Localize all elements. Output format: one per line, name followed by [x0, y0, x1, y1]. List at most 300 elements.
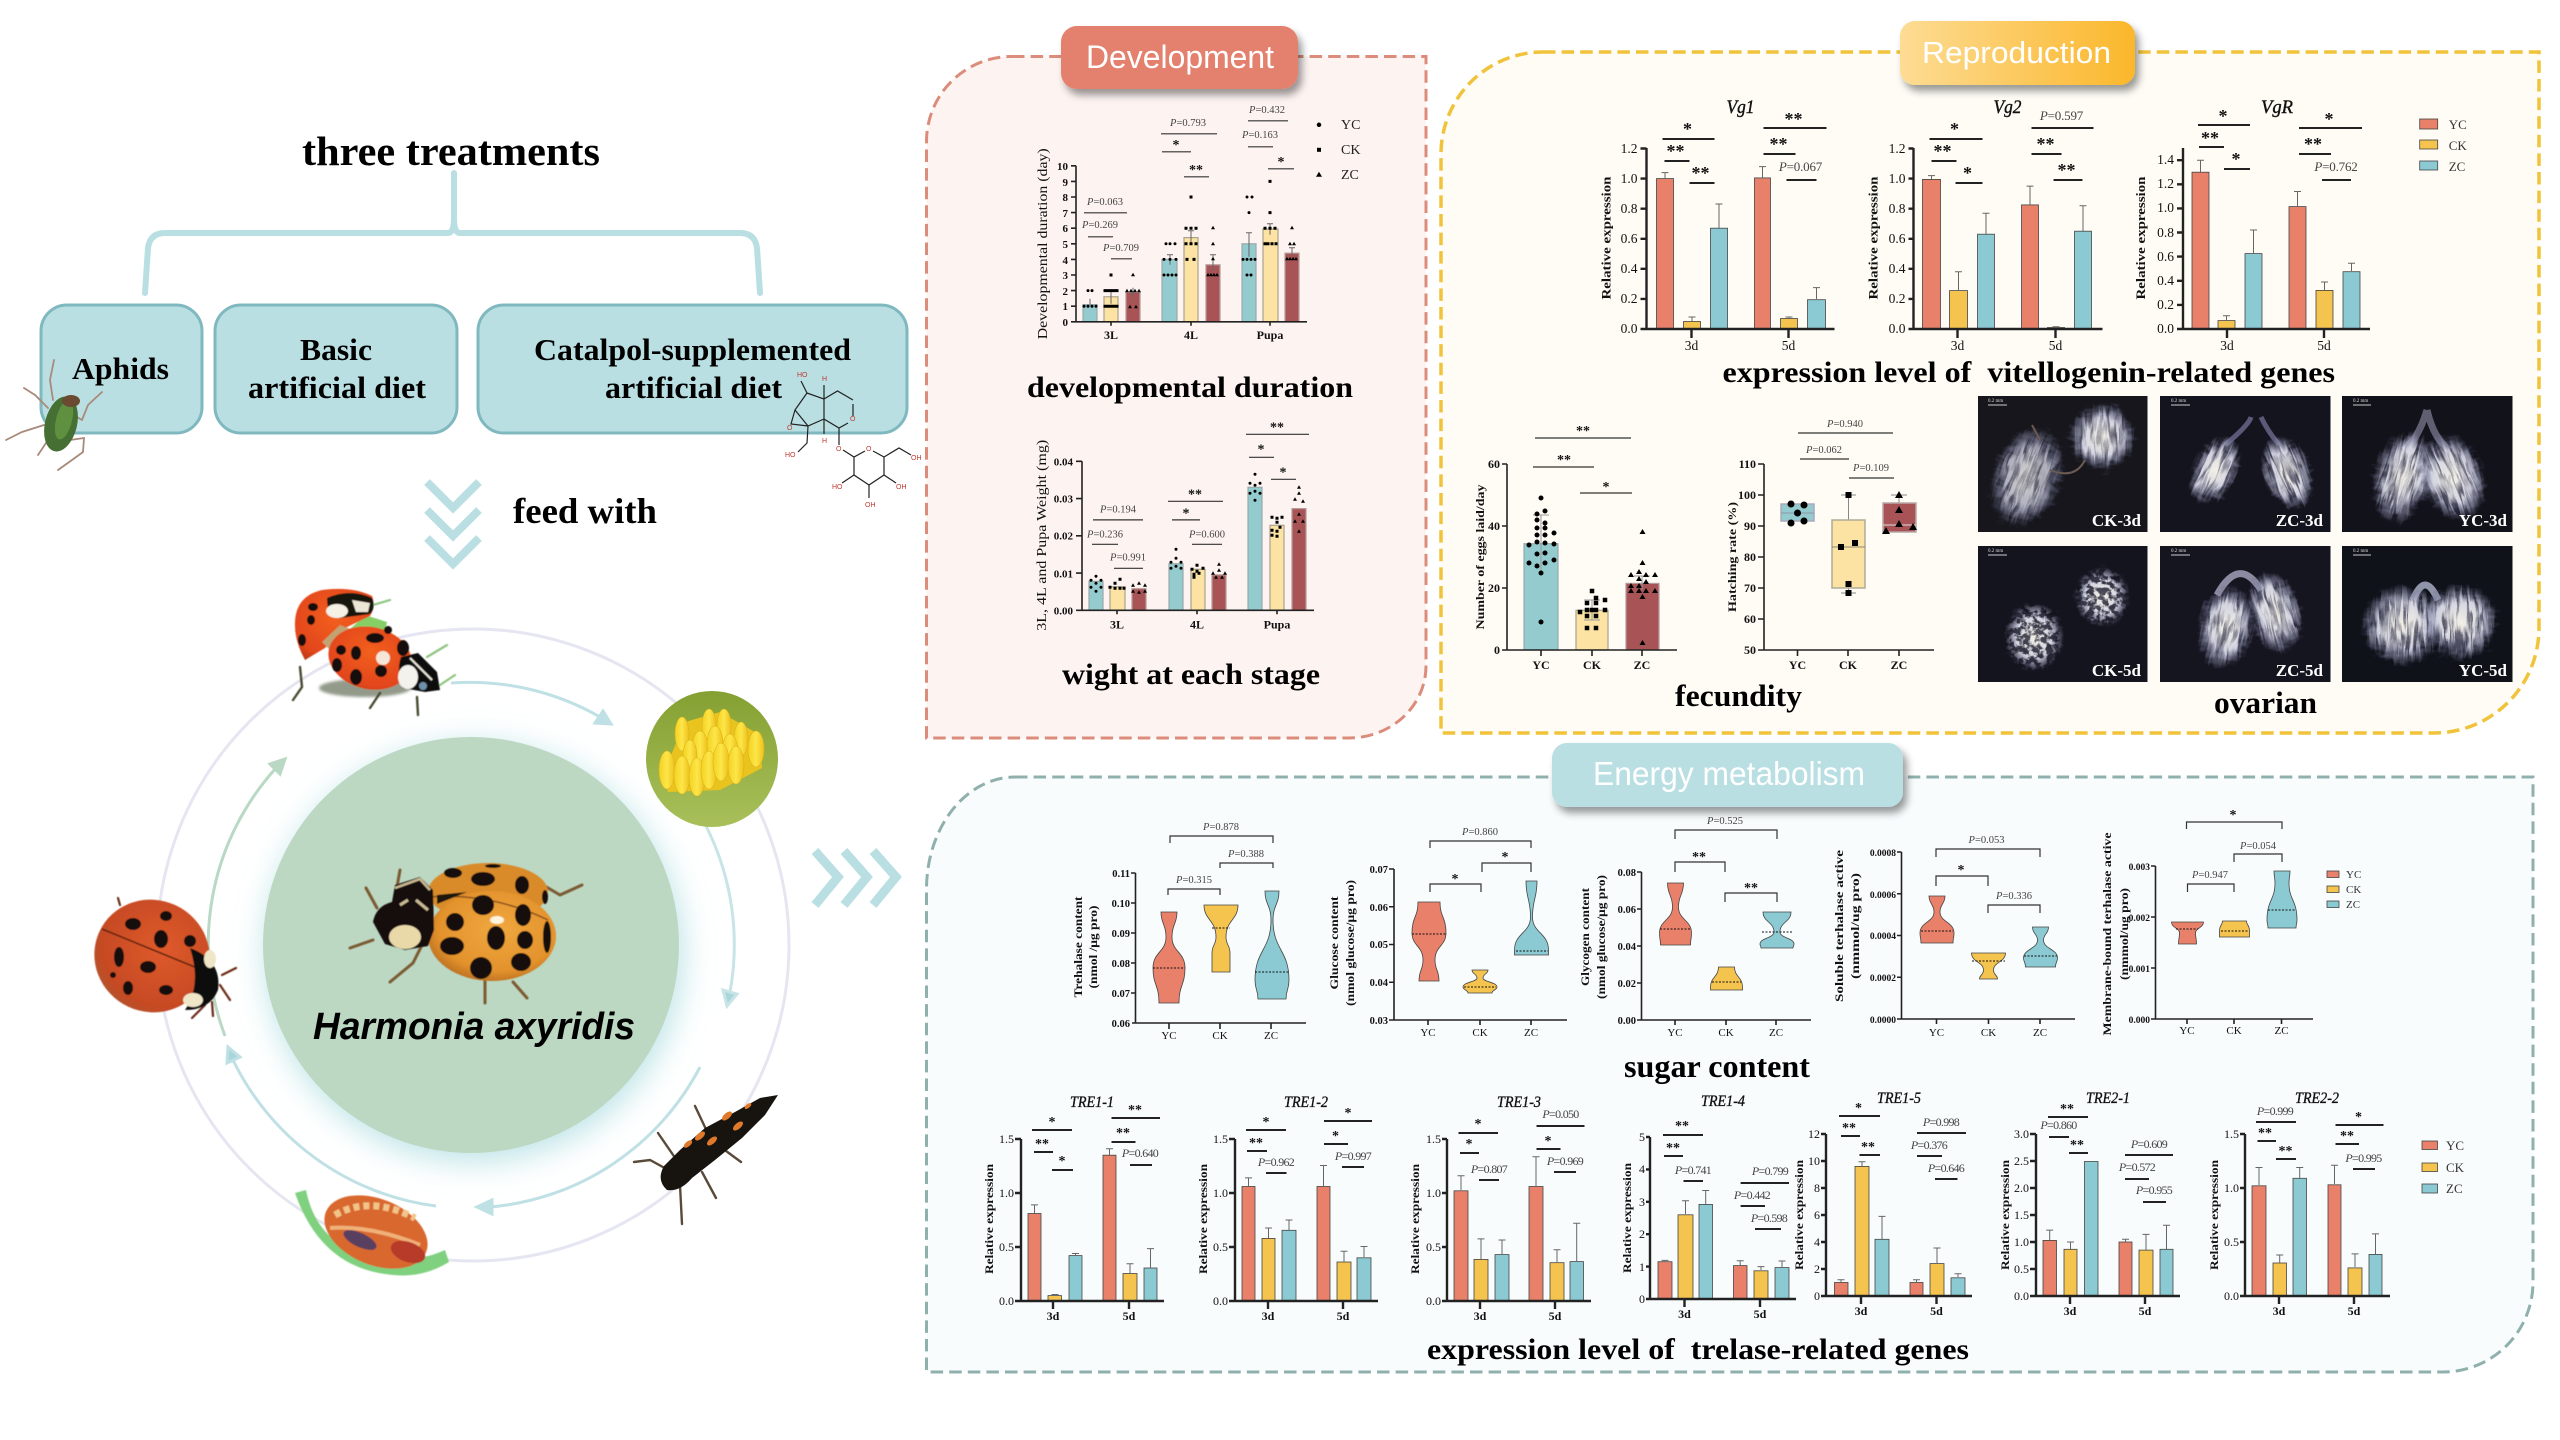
chart: glucose content violin: P=0.860	[1461, 827, 1498, 838]
chart: glycogen content violin: (nmol glucose/μg pro)	[1594, 875, 1608, 999]
chart: trehalase content violin: 0.06	[1112, 1019, 1130, 1030]
chart: TRE1-3 expression	[1408, 1094, 1591, 1323]
icon: catalpol chemical structure: HO	[785, 452, 796, 459]
chart: Vg1 expression: P=0.067	[1778, 159, 1823, 174]
legend: sugar charts: CK	[2346, 884, 2361, 896]
chart: weight at each stage: 0.01	[1054, 568, 1073, 580]
caption: vitellogenin genes: expression level of vitellogenin-related genes	[1722, 356, 2335, 389]
caption: developmental duration: developmental duration	[1027, 371, 1353, 404]
micrograph: YC-5d ovary	[2342, 546, 2512, 682]
chart: TRE1-5 expression: **	[1861, 1140, 1875, 1155]
chart: developmental duration	[1036, 105, 1360, 342]
chart: soluble trehalase violin: 0.0000	[1870, 1016, 1896, 1026]
chart: TRE2-1 expression: 0.0	[2014, 1289, 2029, 1303]
chart: developmental duration: 10	[1057, 161, 1068, 173]
arrow: larva to pupa	[477, 1067, 700, 1214]
chart: TRE1-2 expression	[1196, 1094, 1378, 1323]
micrograph: YC-5d ovary: YC-5d	[2459, 661, 2508, 680]
chart: TRE1-4 expression: P=0.741	[1674, 1163, 1712, 1177]
chart: TRE1-4 expression: 1	[1639, 1260, 1645, 1274]
icon: pupa on leaf	[295, 1181, 449, 1283]
chart: TRE1-5 expression: 2	[1814, 1262, 1820, 1276]
chart: soluble trehalase violin: ZC	[2033, 1027, 2047, 1039]
chart: number of eggs laid: 60	[1488, 457, 1500, 471]
chart: hatching rate: P=0.109	[1852, 463, 1889, 474]
icon: catalpol chemical structure: HO	[797, 372, 808, 379]
chart: TRE1-4 expression: 3	[1639, 1195, 1645, 1209]
chart: soluble trehalase violin: 0.0004	[1870, 932, 1896, 942]
chart: TRE1-3 expression: *	[1466, 1137, 1472, 1152]
chart: trehalase content violin: 0.10	[1112, 899, 1130, 910]
chart: glucose content violin: 0.05	[1370, 940, 1388, 951]
chart: developmental duration: P=0.709	[1102, 243, 1139, 254]
chart: TRE1-2 expression: TRE1-2	[1284, 1094, 1328, 1111]
chart: TRE2-2 expression: **	[2340, 1129, 2354, 1144]
chart: developmental duration: 4	[1062, 255, 1068, 267]
chart: TRE2-2 expression: 3d	[2273, 1304, 2286, 1318]
chart: TRE1-3 expression: Relative expression	[1408, 1164, 1422, 1274]
legend: ZC	[1341, 168, 1359, 183]
micrograph: CK-5d ovary: CK-5d	[2092, 661, 2142, 680]
chart: membrane-bound trehalase violin: P=0.054	[2239, 841, 2277, 852]
chart: TRE1-3 expression: 0.0	[1426, 1294, 1441, 1308]
chart: Vg1 expression: 1.2	[1621, 141, 1638, 156]
arrow: adult to eggs	[451, 682, 611, 724]
chart: VgR expression: 0.6	[2157, 249, 2174, 264]
box: Aphids	[41, 305, 202, 433]
chart: TRE2-2 expression	[2207, 1090, 2390, 1318]
micrograph: CK-3d ovary: 0.2 mm	[1988, 399, 2003, 404]
central green circle	[263, 737, 679, 1153]
chart: Vg1 expression: 0.4	[1621, 261, 1638, 276]
legend: trelase genes: CK	[2446, 1160, 2465, 1175]
chart: Vg2 expression: 0.8	[1889, 201, 1906, 216]
chart: TRE2-1 expression: 3d	[2064, 1304, 2077, 1318]
legend: vitellogenin genes: YC	[2449, 117, 2467, 132]
chart: glucose content violin: (nmol glucose/μg pro)	[1343, 880, 1357, 1006]
chart: weight at each stage: Pupa	[1264, 617, 1290, 631]
chart: glycogen content violin: 0.00	[1618, 1016, 1636, 1027]
chart: developmental duration: **	[1189, 163, 1203, 178]
chart: soluble trehalase violin: P=0.336	[1995, 891, 2032, 902]
chart: number of eggs laid: Number of eggs laid/day	[1473, 484, 1487, 630]
chart: TRE1-5 expression: 5d	[1930, 1304, 1943, 1318]
micrograph: CK-3d ovary	[1975, 396, 2148, 538]
chart: membrane-bound trehalase violin: Membrane-bound terhalase active	[2100, 832, 2114, 1036]
chart: trehalase content violin	[1071, 822, 1306, 1042]
caption: sugar content: sugar content	[1624, 1048, 1810, 1084]
chart: TRE1-3 expression: P=0.050	[1541, 1107, 1579, 1121]
chart: TRE1-3 expression: *	[1544, 1134, 1552, 1149]
chart: trehalase content violin: Trehalase content	[1071, 896, 1085, 997]
box: Basic artificial diet: artificial diet	[248, 370, 427, 405]
chart: TRE1-5 expression: **	[1842, 1121, 1856, 1136]
micrograph: ZC-3d ovary: ZC-3d	[2276, 511, 2324, 530]
chart: hatching rate: P=0.062	[1805, 445, 1842, 456]
chart: TRE1-5 expression	[1792, 1090, 1972, 1318]
chart: VgR expression	[2133, 97, 2370, 353]
legend: trelase genes	[2422, 1138, 2465, 1196]
chart: TRE1-1 expression: **	[1116, 1126, 1130, 1141]
chart: TRE1-1 expression: 0.0	[999, 1294, 1014, 1308]
chart: VgR expression: 0.8	[2157, 225, 2174, 240]
icon: mating ladybugs	[293, 589, 455, 715]
chart: number of eggs laid: YC	[1532, 658, 1550, 672]
chart: weight at each stage: 4L	[1190, 617, 1204, 631]
chart: TRE2-1 expression: Relative expression	[1998, 1160, 2012, 1270]
chart: weight at each stage: 0.03	[1054, 493, 1074, 505]
chart: TRE1-2 expression: 0.5	[1213, 1240, 1228, 1254]
legend: vitellogenin genes: ZC	[2449, 159, 2465, 174]
chart: Vg1 expression: 0.0	[1621, 321, 1638, 336]
chart: membrane-bound trehalase violin: P=0.947	[2191, 870, 2228, 881]
box: Catalpol-supplemented artificial diet: artificial diet	[605, 370, 783, 405]
chart: TRE2-1 expression: **	[2060, 1102, 2074, 1117]
chart: developmental duration: 3	[1062, 270, 1068, 282]
chart: developmental duration: 8	[1062, 192, 1068, 204]
chart: trehalase content violin: P=0.388	[1227, 849, 1264, 860]
chart: Vg1 expression: Relative expression	[1598, 176, 1614, 300]
chart: Vg2 expression: 1.2	[1889, 141, 1906, 156]
icon: catalpol chemical structure: OH	[865, 502, 876, 509]
chart: TRE2-2 expression: 0.5	[2224, 1235, 2239, 1249]
chart: TRE1-5 expression: P=0.998	[1922, 1115, 1960, 1129]
chart: TRE1-3 expression: P=0.969	[1546, 1154, 1584, 1168]
chart: weight at each stage	[1035, 420, 1314, 631]
chart: hatching rate: 70	[1744, 581, 1756, 595]
heading badge: Reproduction	[1900, 21, 2135, 85]
chart: TRE1-2 expression: 3d	[1262, 1309, 1275, 1323]
chart: TRE2-2 expression: **	[2278, 1144, 2292, 1159]
chart: membrane-bound trehalase violin: CK	[2226, 1025, 2242, 1037]
chart: Vg2 expression: P=0.597	[2039, 108, 2084, 123]
chart: VgR expression: 0.4	[2157, 273, 2174, 288]
chart: trehalase content violin: YC	[1161, 1030, 1177, 1042]
chart: TRE1-5 expression: 8	[1814, 1181, 1820, 1195]
micrograph: ZC-5d ovary: ZC-5d	[2276, 661, 2324, 680]
caption: trelase genes: expression level of trelase-related genes	[1427, 1333, 1969, 1366]
micrograph: YC-3d ovary: YC-3d	[2459, 511, 2508, 530]
chart: glycogen content violin: **	[1744, 881, 1758, 896]
chart: Vg2 expression: Vg2	[1994, 97, 2022, 118]
micrograph: ZC-5d ovary	[2160, 546, 2330, 682]
chart: TRE2-2 expression: P=0.999	[2256, 1104, 2294, 1118]
micrograph: YC-3d ovary: 0.2 mm	[2353, 399, 2368, 404]
chart: glycogen content violin: 0.02	[1618, 979, 1636, 990]
chart: trehalase content violin: P=0.315	[1175, 875, 1212, 886]
chart: TRE1-2 expression: 0.0	[1213, 1294, 1228, 1308]
icon: catalpol chemical structure: O	[787, 425, 793, 432]
chart: Vg2 expression: 0.4	[1889, 261, 1906, 276]
chart: soluble trehalase violin	[1832, 835, 2075, 1039]
arrow: pupa to adult	[227, 1047, 436, 1206]
chart: VgR expression: 0.2	[2157, 297, 2174, 312]
legend: vitellogenin genes	[2420, 117, 2467, 174]
heading: three treatments: three treatments	[302, 128, 600, 174]
chart: hatching rate: Hatching rate (%)	[1725, 502, 1739, 612]
chart: TRE1-1 expression: 3d	[1047, 1309, 1060, 1323]
chart: weight at each stage: P=0.991	[1109, 552, 1146, 563]
chart: TRE1-2 expression: **	[1249, 1136, 1263, 1151]
chart: TRE2-1 expression: P=0.609	[2130, 1137, 2168, 1151]
chart: soluble trehalase violin: P=0.053	[1968, 835, 2004, 846]
chart: TRE1-4 expression: 5d	[1754, 1307, 1767, 1321]
icon: catalpol chemical structure: O	[866, 446, 872, 453]
chart: developmental duration: 4L	[1184, 328, 1198, 342]
chart: soluble trehalase violin: *	[1958, 863, 1964, 878]
chart: weight at each stage: 0.00	[1054, 605, 1074, 617]
chart: Vg2 expression: Relative expression	[1866, 176, 1880, 300]
icon: catalpol chemical structure: H	[822, 438, 827, 445]
chart: developmental duration: 9	[1062, 177, 1068, 189]
chart: trehalase content violin: ZC	[1264, 1030, 1278, 1042]
chart: TRE1-5 expression: TRE1-5	[1877, 1090, 1921, 1107]
panel: Energy metabolism	[926, 743, 2533, 1372]
chart: TRE2-2 expression: 1.5	[2224, 1127, 2239, 1141]
chart: weight at each stage: P=0.236	[1086, 529, 1123, 540]
chart: developmental duration: P=0.269	[1081, 220, 1118, 231]
chart: VgR expression: *	[2232, 149, 2240, 169]
chart: Vg1 expression: 0.6	[1621, 231, 1638, 246]
chart: TRE1-2 expression: *	[1344, 1106, 1352, 1121]
chart: developmental duration: *	[1278, 155, 1284, 170]
chart: weight at each stage: *	[1258, 442, 1264, 457]
chart: TRE1-1 expression: **	[1128, 1103, 1142, 1118]
chart: TRE1-2 expression: P=0.962	[1257, 1155, 1295, 1169]
chart: VgR expression: 3d	[2220, 338, 2234, 353]
chart: Vg1 expression: 0.2	[1621, 291, 1638, 306]
chart: developmental duration: 3L	[1104, 328, 1118, 342]
chart: Vg2 expression	[1866, 97, 2102, 353]
chart: developmental duration: Developmental duration (day)	[1036, 148, 1051, 339]
chart: VgR expression: 1.0	[2157, 200, 2174, 215]
chart: membrane-bound trehalase violin: 0.000	[2129, 1016, 2150, 1026]
chart: Vg1 expression: 1.0	[1621, 171, 1638, 186]
caption: ovarian: ovarian	[2214, 685, 2317, 720]
chart: TRE2-1 expression	[1998, 1090, 2180, 1318]
chart: Vg2 expression: **	[1934, 141, 1952, 161]
chart: VgR expression: 1.2	[2157, 176, 2174, 191]
chart: soluble trehalase violin: 0.0006	[1870, 891, 1896, 901]
chart: TRE1-2 expression: *	[1262, 1115, 1270, 1130]
chart: Vg2 expression: 1.0	[1889, 171, 1906, 186]
label: Harmonia axyridis: Harmonia axyridis	[313, 1006, 635, 1048]
chart: weight at each stage: *	[1280, 465, 1286, 480]
chart: membrane-bound trehalase violin: *	[2230, 808, 2236, 823]
heading badge: Energy metabolism	[1552, 743, 1903, 807]
chart: membrane-bound trehalase violin: YC	[2179, 1025, 2195, 1037]
chart: TRE2-1 expression: P=0.955	[2135, 1183, 2173, 1197]
chart: TRE1-4 expression: P=0.799	[1751, 1164, 1789, 1178]
chart: glucose content violin: *	[1452, 872, 1458, 887]
chart: TRE1-3 expression: 3d	[1474, 1309, 1487, 1323]
chart: developmental duration: P=0.432	[1248, 105, 1285, 116]
heading badge: Reproduction: Reproduction	[1922, 35, 2111, 70]
chart: glycogen content violin: 0.08	[1618, 868, 1636, 879]
chart: TRE1-2 expression: P=0.997	[1334, 1149, 1372, 1163]
chart: number of eggs laid: **	[1576, 424, 1590, 439]
micrograph: ZC-5d ovary: 0.2 mm	[2171, 549, 2186, 554]
chart: Vg1 expression: **	[1666, 141, 1684, 161]
chart: number of eggs laid: ZC	[1634, 658, 1650, 672]
chart: glucose content violin: CK	[1472, 1027, 1488, 1039]
chart: developmental duration: 5	[1062, 239, 1068, 251]
chart: TRE2-2 expression: 1.0	[2224, 1181, 2239, 1195]
chart: TRE1-1 expression: TRE1-1	[1070, 1094, 1114, 1111]
chart: glucose content violin: *	[1502, 850, 1508, 865]
box: Basic artificial diet: Basic	[300, 332, 372, 367]
chart: hatching rate: 90	[1744, 519, 1756, 533]
chart: TRE2-1 expression: TRE2-1	[2086, 1090, 2130, 1107]
icon: catalpol chemical structure: HO	[832, 484, 843, 491]
chart: TRE1-1 expression: P=0.640	[1121, 1146, 1159, 1160]
chart: soluble trehalase violin: (nmmol/ug pro)	[1848, 873, 1862, 979]
chart: TRE1-4 expression: 4	[1639, 1162, 1645, 1176]
chart: TRE1-4 expression: TRE1-4	[1701, 1093, 1745, 1110]
chart: TRE2-2 expression: TRE2-2	[2295, 1090, 2339, 1107]
chart: TRE2-2 expression: P=0.995	[2344, 1151, 2382, 1165]
arrow: eggs to larva	[706, 826, 737, 1006]
chart: TRE1-5 expression: 6	[1814, 1208, 1820, 1222]
chart: TRE2-1 expression: 5d	[2139, 1304, 2152, 1318]
chart: glucose content violin: Glucose content	[1327, 896, 1341, 990]
chart: TRE1-3 expression: TRE1-3	[1497, 1094, 1541, 1111]
micrograph: ZC-3d ovary	[2160, 396, 2330, 532]
chart: TRE1-1 expression: *	[1058, 1154, 1066, 1169]
chart: TRE1-2 expression: 1.5	[1213, 1132, 1228, 1146]
heading badge: Development	[1061, 26, 1298, 89]
chart: Vg2 expression: 3d	[1951, 338, 1964, 353]
chart: number of eggs laid: 20	[1488, 581, 1500, 595]
panel: Development	[926, 26, 1426, 738]
chart: hatching rate: 80	[1744, 550, 1756, 564]
chart: developmental duration: 6	[1062, 223, 1068, 235]
chart: glycogen content violin: CK	[1718, 1027, 1734, 1039]
chart: TRE1-1 expression: Relative expression	[982, 1164, 996, 1274]
chart: VgR expression: VgR	[2261, 97, 2293, 118]
chart: VgR expression: *	[2218, 106, 2228, 126]
chart: TRE2-2 expression: 0.0	[2224, 1289, 2239, 1303]
chart: glucose content violin	[1327, 827, 1567, 1039]
legend: CK	[1341, 143, 1360, 158]
chart: TRE1-3 expression: 1.5	[1426, 1132, 1441, 1146]
chart: weight at each stage: 3L, 4L and Pupa Weight (mg)	[1035, 439, 1050, 631]
life cycle diagram	[76, 589, 789, 1283]
chart: TRE1-3 expression: *	[1474, 1117, 1482, 1132]
heading badge: Energy metabolism: Energy metabolism	[1593, 755, 1865, 792]
legend: sugar charts: ZC	[2346, 899, 2360, 911]
chart: TRE2-1 expression: **	[2070, 1138, 2084, 1153]
chart: VgR expression: **	[2201, 128, 2219, 148]
micrograph: CK-5d ovary: 0.2 mm	[1988, 549, 2003, 554]
chart: TRE1-3 expression: 5d	[1549, 1309, 1562, 1323]
icon: catalpol chemical structure: O	[836, 446, 842, 453]
chart: Vg2 expression: 5d	[2049, 338, 2062, 353]
icon: aphid	[6, 360, 102, 470]
chart: TRE1-1 expression: 0.5	[999, 1240, 1014, 1254]
chart: TRE1-2 expression: *	[1332, 1129, 1339, 1144]
icon: feed-with chevrons	[427, 482, 479, 564]
icon: central ladybug	[350, 863, 582, 1003]
chart: hatching rate: 50	[1744, 643, 1756, 657]
chart: TRE1-1 expression: **	[1035, 1137, 1049, 1152]
icon: catalpol chemical structure: O	[850, 416, 856, 423]
chart: TRE1-1 expression: 1.0	[999, 1186, 1014, 1200]
chart: glycogen content violin: 0.04	[1618, 942, 1637, 953]
chart: TRE1-3 expression: 1.0	[1426, 1186, 1441, 1200]
chart: glucose content violin: 0.06	[1370, 903, 1388, 914]
chart: TRE1-4 expression: 5	[1639, 1130, 1645, 1144]
chart: TRE1-5 expression: 10	[1808, 1154, 1820, 1168]
icon: adult ladybug	[76, 881, 236, 1031]
chart: TRE1-5 expression: 3d	[1855, 1304, 1868, 1318]
chart: glycogen content violin: Glycogen content	[1578, 888, 1592, 986]
chart: soluble trehalase violin: Soluble terhalase active	[1832, 849, 1846, 1002]
chart: Vg2 expression: 0.2	[1889, 291, 1906, 306]
chart: TRE2-1 expression: 2.5	[2014, 1154, 2029, 1168]
chart: membrane-bound trehalase violin: (nmmol/ug pro)	[2117, 888, 2131, 980]
legend: vitellogenin genes: CK	[2449, 138, 2467, 153]
chart: weight at each stage: **	[1188, 487, 1202, 502]
chart: TRE1-3 expression: 0.5	[1426, 1240, 1441, 1254]
chart: TRE2-1 expression: P=0.572	[2118, 1160, 2156, 1174]
legend	[1316, 118, 1360, 183]
chart: Vg2 expression: 0.0	[1889, 321, 1906, 336]
icon: catalpol chemical structure	[785, 372, 922, 509]
chart: TRE2-2 expression: *	[2355, 1110, 2362, 1125]
chart: Vg1 expression: **	[1770, 134, 1788, 154]
chart: hatching rate: CK	[1839, 658, 1858, 672]
chart: developmental duration: P=0.163	[1241, 130, 1278, 141]
chart: glycogen content violin: P=0.525	[1706, 816, 1743, 827]
chart: TRE1-1 expression: *	[1048, 1115, 1056, 1130]
chart: TRE1-5 expression: P=0.646	[1927, 1161, 1965, 1175]
chart: TRE2-1 expression: 1.0	[2014, 1235, 2029, 1249]
chart: Vg2 expression: **	[2036, 134, 2054, 154]
chart: Vg2 expression: *	[1963, 163, 1972, 183]
chart: developmental duration: 7	[1062, 208, 1068, 220]
chart: Vg1 expression: *	[1683, 119, 1692, 139]
chart: Vg1 expression: 5d	[1782, 338, 1796, 353]
label: feed with: feed with	[513, 491, 657, 531]
chart: glucose content violin: ZC	[1524, 1027, 1538, 1039]
micrograph: CK-5d ovary	[1978, 546, 2148, 682]
chart: trehalase content violin: 0.07	[1112, 989, 1130, 1000]
chart: glycogen content violin	[1578, 816, 1811, 1039]
chart: hatching rate: 110	[1739, 457, 1756, 471]
chart: membrane-bound trehalase violin: 0.002	[2129, 914, 2150, 924]
caption: wight at each stage: wight at each stage	[1062, 658, 1320, 691]
chart: soluble trehalase violin: 0.0008	[1870, 849, 1896, 859]
chart: TRE1-2 expression: Relative expression	[1196, 1164, 1210, 1274]
chart: number of eggs laid: *	[1602, 480, 1610, 495]
chart: TRE2-1 expression: P=0.860	[2039, 1118, 2077, 1132]
chart: weight at each stage: **	[1270, 420, 1284, 435]
chart: Vg1 expression: 0.8	[1621, 201, 1638, 216]
chart: TRE1-4 expression: P=0.598	[1750, 1211, 1788, 1225]
icon: catalpol chemical structure: H	[822, 376, 827, 383]
icon: catalpol chemical structure: OH	[896, 484, 906, 491]
chart: VgR expression: 0.0	[2157, 321, 2174, 336]
chart: number of eggs laid: **	[1557, 453, 1571, 468]
chart: TRE1-4 expression	[1620, 1093, 1796, 1321]
chart: TRE1-4 expression: **	[1666, 1141, 1680, 1156]
chart: trehalase content violin: (nmol /μg pro)	[1086, 906, 1100, 988]
chart: TRE2-1 expression: 1.5	[2014, 1208, 2029, 1222]
chart: membrane-bound trehalase violin	[2100, 808, 2313, 1037]
chart: glucose content violin: 0.03	[1370, 1016, 1388, 1027]
chart: glycogen content violin: **	[1692, 850, 1706, 865]
